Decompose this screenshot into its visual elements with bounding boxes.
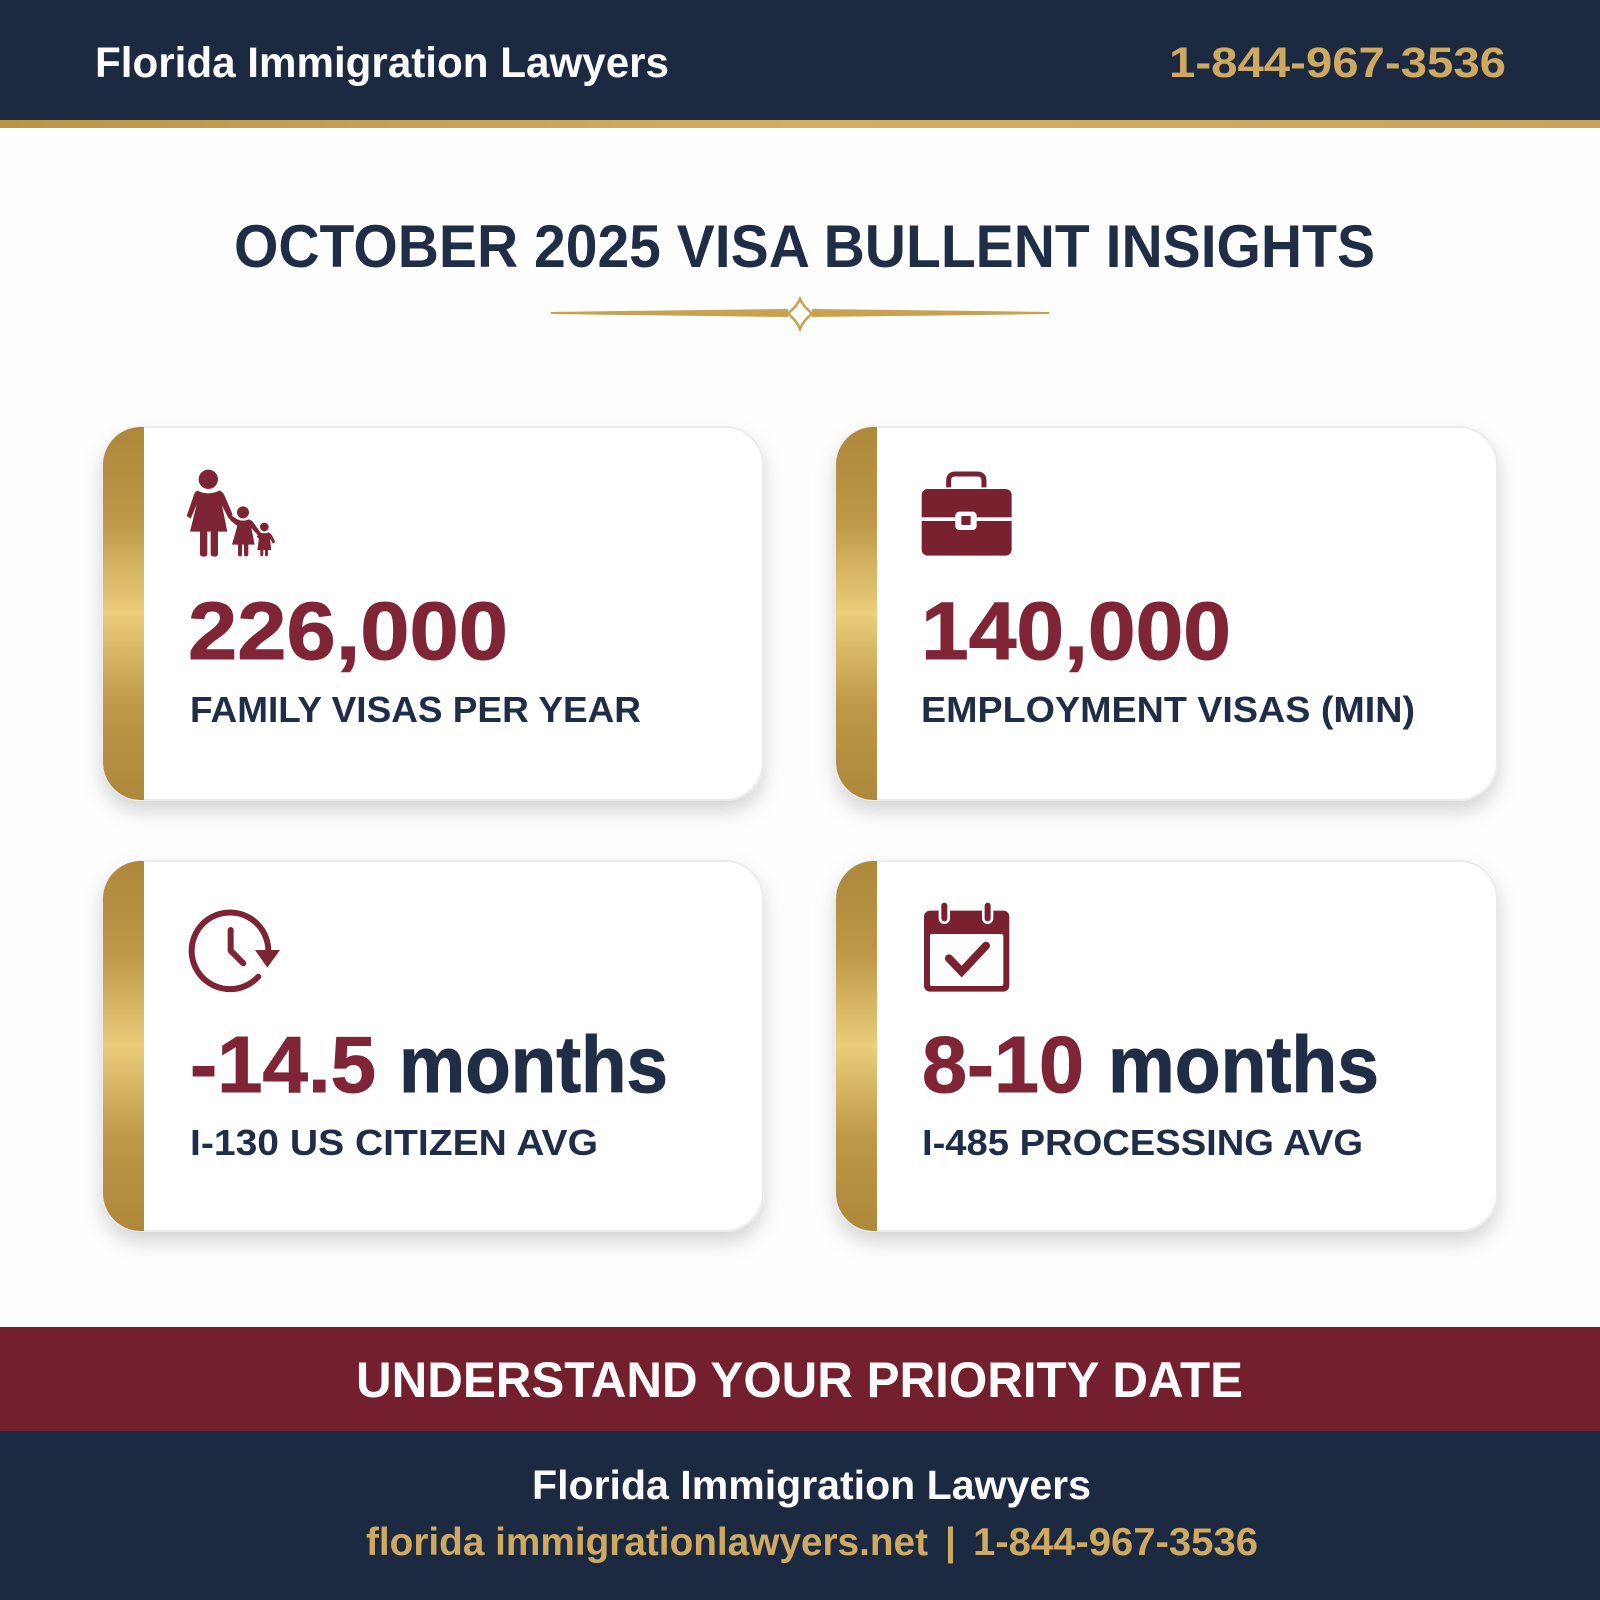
icon: calendar with check [924, 900, 1009, 992]
card background [103, 427, 763, 800]
banner text: UNDERSTAND YOUR PRIORITY DATE [356, 1352, 1243, 1408]
stat label: FAMILY VISAS PER YEAR [190, 689, 641, 730]
card background [836, 861, 1497, 1231]
icon: clock with arrow [192, 913, 280, 989]
footer separator: | [945, 1521, 956, 1564]
panel: I-130 processing [103, 861, 763, 1231]
footer website: florida immigrationlawyers.net [366, 1521, 928, 1564]
stat value: 226,000 [188, 586, 508, 677]
panel: I-485 processing [836, 861, 1497, 1231]
icon: briefcase [922, 474, 1012, 556]
card background [836, 427, 1497, 800]
panel: employment visas [836, 427, 1497, 800]
title divider with diamond [551, 299, 1049, 329]
footer phone number: 1-844-967-3536 [973, 1521, 1258, 1564]
stat unit: months [1108, 1020, 1379, 1109]
stat value: 140,000 [921, 586, 1231, 677]
card background [103, 861, 763, 1231]
header firm name: Florida Immigration Lawyers [95, 39, 669, 87]
stat unit: months [399, 1020, 668, 1109]
stat label: EMPLOYMENT VISAS (MIN) [921, 689, 1415, 730]
stat value: 8-10 [922, 1020, 1084, 1109]
stat label: I-485 PROCESSING AVG [922, 1122, 1363, 1163]
icon: family [187, 470, 275, 557]
gold side strip [836, 861, 877, 1231]
footer firm name: Florida Immigration Lawyers [532, 1462, 1091, 1508]
title: OCTOBER 2025 VISA BULLENT INSIGHTS [234, 213, 1375, 280]
gold side strip [103, 861, 144, 1231]
stat value: -14.5 [190, 1020, 376, 1109]
gold side strip [836, 427, 877, 800]
footer [0, 1431, 1600, 1600]
gold side strip [103, 427, 144, 800]
stat label: I-130 US CITIZEN AVG [190, 1122, 598, 1163]
panel: family visas [103, 427, 763, 800]
header phone number: 1-844-967-3536 [1169, 39, 1506, 87]
call-to-action banner [0, 1327, 1600, 1431]
header bar [0, 0, 1600, 128]
